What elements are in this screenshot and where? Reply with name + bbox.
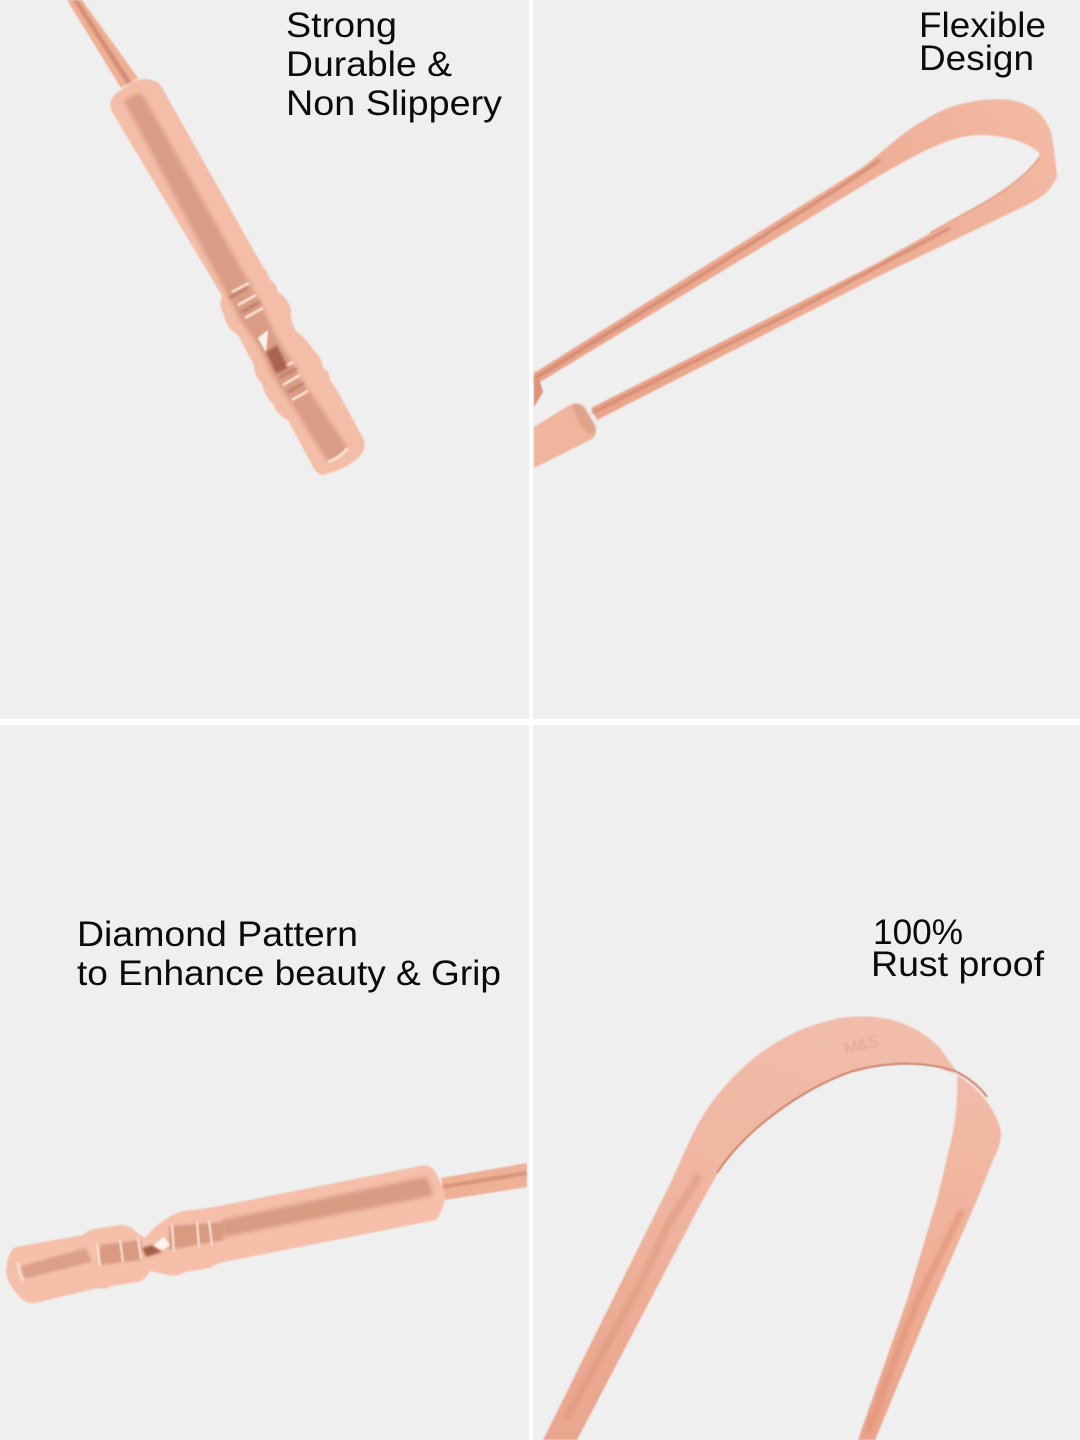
text: flexible design: Flexible [919, 5, 1046, 45]
text: diamond pattern to enhance beauty and grip: Diamond Pattern [77, 914, 358, 954]
panel: rust proof [533, 725, 1080, 1440]
text: diamond pattern to enhance beauty and grip [77, 914, 501, 993]
text: 100 percent rust proof: Rust proof [871, 944, 1044, 984]
text: strong durable non slippery: Durable & [286, 44, 452, 84]
text: 100 percent rust proof: 100% [873, 912, 963, 952]
text: strong durable non slippery: Non Slippery [286, 83, 502, 123]
text: diamond pattern to enhance beauty and grip: to Enhance beauty & Grip [77, 953, 501, 993]
icon: cleaner handle horizontal [6, 1163, 527, 1303]
icon: cleaner curved blade close-up [543, 1016, 1001, 1440]
text: flexible design [919, 5, 1046, 78]
text: strong durable non slippery: Strong [286, 5, 397, 45]
text: flexible design: Design [919, 38, 1034, 78]
text: strong durable non slippery [286, 5, 502, 123]
panel: diamond pattern [0, 725, 529, 1440]
panel: strong durable and non slippery [0, 0, 529, 719]
icon: flexible cleaner loop [534, 99, 1057, 468]
text: 100 percent rust proof [871, 912, 1044, 984]
icon: cleaner curved blade close-up: M&S [843, 1033, 881, 1058]
panel: flexible design [533, 0, 1080, 719]
icon: cleaner handle angled downward [67, 0, 365, 475]
